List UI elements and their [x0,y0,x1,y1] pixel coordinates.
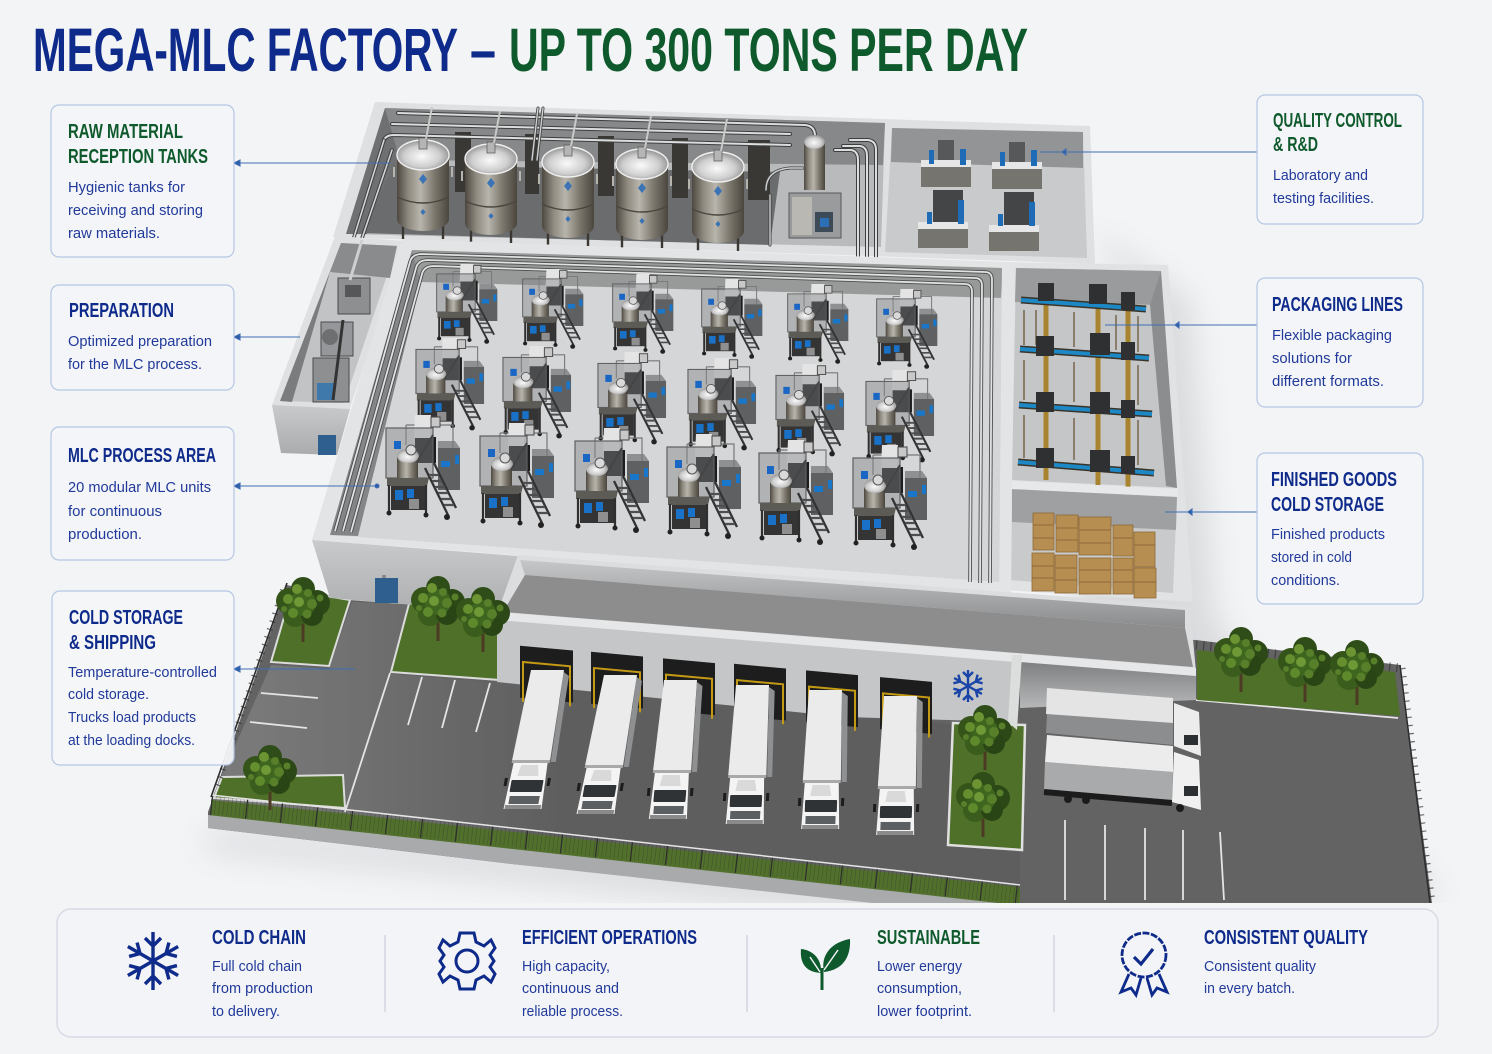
benefit: cold chain: COLD CHAIN [212,927,306,949]
card: quality control and R&D [1257,95,1423,224]
zone: packaging lines [1011,262,1177,594]
zone: loading dock building [497,555,1196,738]
title: – [470,16,496,84]
site perimeter base [208,815,1024,906]
card: packaging lines: PACKAGING LINES [1272,294,1403,316]
trees [243,576,1384,837]
card: finished goods cold storage: Finished products [1271,526,1385,543]
card: raw material reception tanks: RECEPTION TANKS [68,146,208,168]
main pipe bundle [335,254,992,583]
card: preparation: for the MLC process. [68,356,202,373]
benefit: sustainable: SUSTAINABLE [877,927,980,949]
card: finished goods cold storage: stored in cold [1271,549,1352,566]
card: packaging lines: different formats. [1272,373,1384,390]
zone: quality control room [885,128,1087,258]
card: quality control and R&D: Laboratory and [1273,167,1368,184]
icon: quality rosette [1121,933,1167,995]
card: quality control and R&D: & R&D [1273,134,1318,156]
card: MLC process area [51,427,234,560]
building: column separator and rim [1005,262,1008,605]
card: MLC process area: 20 modular MLC units [68,479,211,496]
zone: MLC process area [312,239,1006,592]
card: cold storage and shipping: at the loading docks. [68,732,195,749]
benefit: cold chain [212,927,313,1020]
auxiliary vessel and skid [789,135,841,238]
process pipework [352,106,878,258]
preparation equipment [313,240,370,402]
card: finished goods cold storage: COLD STORAGE [1271,494,1384,516]
title [33,16,1028,84]
card: cold storage and shipping [52,591,234,765]
leader lines [234,149,1257,672]
card: quality control and R&D: QUALITY CONTROL [1273,110,1402,132]
zone: raw material tank room [333,102,1095,264]
card: quality control and R&D: testing facilities. [1273,190,1374,207]
card: finished goods cold storage: conditions. [1271,572,1340,589]
benefit: consistent quality: Consistent quality [1204,958,1316,975]
card: MLC process area: production. [68,526,142,543]
card: raw material reception tanks: receiving and storing [68,202,203,219]
card: raw material reception tanks: RAW MATERIAL [68,121,183,143]
card: packaging lines [1257,278,1423,407]
pallets of cartons [1032,513,1156,598]
card: cold storage and shipping: cold storage. [68,686,149,703]
side trucks [1044,688,1201,812]
card: cold storage and shipping: Temperature-controlled [68,664,217,681]
zone: finished goods cold storage [1009,481,1178,598]
loading dock doors [520,646,932,738]
icon: snowflake [124,932,182,990]
card: finished goods cold storage: FINISHED GOODS [1271,469,1397,491]
card: packaging lines: solutions for [1272,350,1352,367]
back equipment silhouettes [455,132,770,200]
packaging conveyors [1018,283,1154,488]
card: preparation: Optimized preparation [68,333,212,350]
benefit: efficient operations [522,927,697,1020]
site ground [208,585,1432,906]
benefit: cold chain: from production [212,980,313,997]
benefit: efficient operations: High capacity, [522,958,610,975]
icon: wall snowflake [952,670,984,702]
benefit: sustainable [877,927,980,1020]
card: cold storage and shipping: & SHIPPING [69,632,156,654]
card: finished goods cold storage [1257,453,1423,604]
card: MLC process area: MLC PROCESS AREA [68,445,216,467]
perimeter fence [211,583,1433,903]
green areas [211,590,1400,905]
card: preparation [51,285,234,390]
card: raw material reception tanks [51,105,234,257]
benefit: efficient operations: continuous and [522,980,619,997]
benefit: efficient operations: EFFICIENT OPERATIONS [522,927,697,949]
icon: sprout leaves [801,939,850,990]
benefit: consistent quality: CONSISTENT QUALITY [1204,927,1368,949]
door [318,435,336,455]
card: MLC process area: for continuous [68,503,162,520]
benefit: sustainable: Lower energy [877,958,962,975]
card: preparation: PREPARATION [69,300,174,322]
benefit: consistent quality [1204,927,1368,997]
icon: entry door [375,575,398,603]
title: MEGA-MLC FACTORY [33,16,458,84]
benefit: cold chain: Full cold chain [212,958,302,975]
zone: preparation room [272,236,406,455]
building: outer front wall [312,540,518,605]
benefit: consistent quality: in every batch. [1204,980,1295,997]
benefit: efficient operations: reliable process. [522,1003,623,1020]
panel: key benefits [57,909,1438,1037]
dock trucks [499,670,925,835]
benefit: sustainable: lower footprint. [877,1003,972,1020]
card: cold storage and shipping: COLD STORAGE [69,607,183,629]
card: cold storage and shipping: Trucks load products [68,709,196,726]
factory site illustration [200,102,1440,930]
20 modular MLC units [386,264,937,550]
card: raw material reception tanks: Hygienic tanks for [68,179,185,196]
benefit: sustainable: consumption, [877,980,962,997]
icon: gear [439,933,495,989]
card: packaging lines: Flexible packaging [1272,327,1392,344]
benefit: cold chain: to delivery. [212,1003,280,1020]
card: raw material reception tanks: raw materials. [68,225,160,242]
title: UP TO 300 TONS PER DAY [509,16,1028,84]
lab benches [918,140,1042,251]
parking markings [250,673,1398,900]
reception tanks [394,107,747,251]
